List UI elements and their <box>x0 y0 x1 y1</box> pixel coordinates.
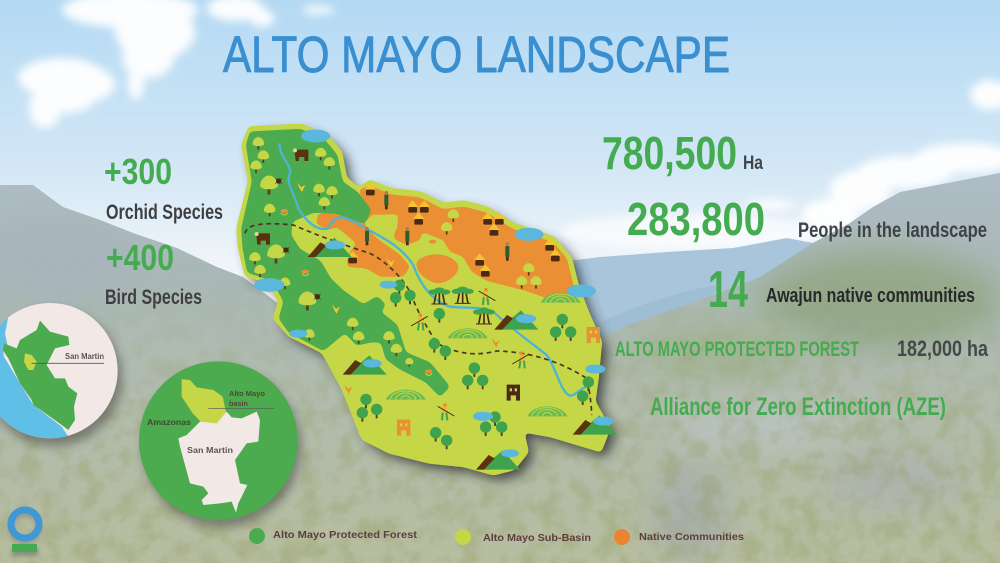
stat: area: 780,500 <box>602 127 737 179</box>
map river <box>279 143 587 396</box>
stat: area: Ha <box>743 153 763 174</box>
stat: bird species: +400 <box>106 237 174 278</box>
stat: bird species: Bird Species <box>105 286 202 309</box>
map icons: people <box>365 191 529 420</box>
stat: orchid species <box>104 151 223 224</box>
map icons: palms <box>428 287 495 324</box>
map icons: birds <box>297 183 500 394</box>
map icons: hills <box>308 238 617 470</box>
map region: protected forest <box>241 129 450 397</box>
map icons: lakes <box>254 129 613 457</box>
stat: people: 283,800 <box>627 193 765 245</box>
map icons: fields <box>386 293 581 416</box>
legend <box>249 528 744 545</box>
map region: native communities <box>316 186 575 299</box>
map icons: yellow trees <box>249 137 542 367</box>
stat: protected forest: ALTO MAYO PROTECTED FOREST <box>615 338 859 361</box>
far ridge <box>560 238 813 350</box>
stat: orchid species: Orchid Species <box>106 201 223 224</box>
stat: native communities: 14 <box>708 261 748 319</box>
map icons: bears <box>255 148 308 245</box>
locator map: San Martin: San Martin <box>187 445 233 455</box>
stat: native communities <box>708 261 975 319</box>
map icons: flowers and insects <box>275 178 436 375</box>
map icons: green trees <box>357 280 594 449</box>
stat: people <box>627 193 987 245</box>
stat: bird species <box>105 237 202 309</box>
locator map: San Martin: basin <box>229 399 248 408</box>
map icons: buildings <box>397 327 600 436</box>
legend: Alto Mayo Protected Forest <box>273 529 418 541</box>
locator map: Peru <box>0 303 122 447</box>
locator map: Peru: San Martin <box>65 352 104 361</box>
legend: Native Communities <box>639 531 744 543</box>
map region: sub-basin <box>238 126 608 473</box>
locator map: San Martin: Amazonas <box>147 418 192 427</box>
map trail <box>245 224 592 415</box>
map icons: huts <box>347 183 561 277</box>
legend: Alto Mayo Sub-Basin <box>483 532 591 544</box>
logo <box>11 510 39 556</box>
title: ALTO MAYO LANDSCAPE <box>223 26 730 83</box>
map <box>238 126 617 480</box>
locator map: San Martin <box>139 361 301 527</box>
stat: orchid species: +300 <box>104 151 172 192</box>
locator map: San Martin: Alto Mayo <box>229 389 265 398</box>
